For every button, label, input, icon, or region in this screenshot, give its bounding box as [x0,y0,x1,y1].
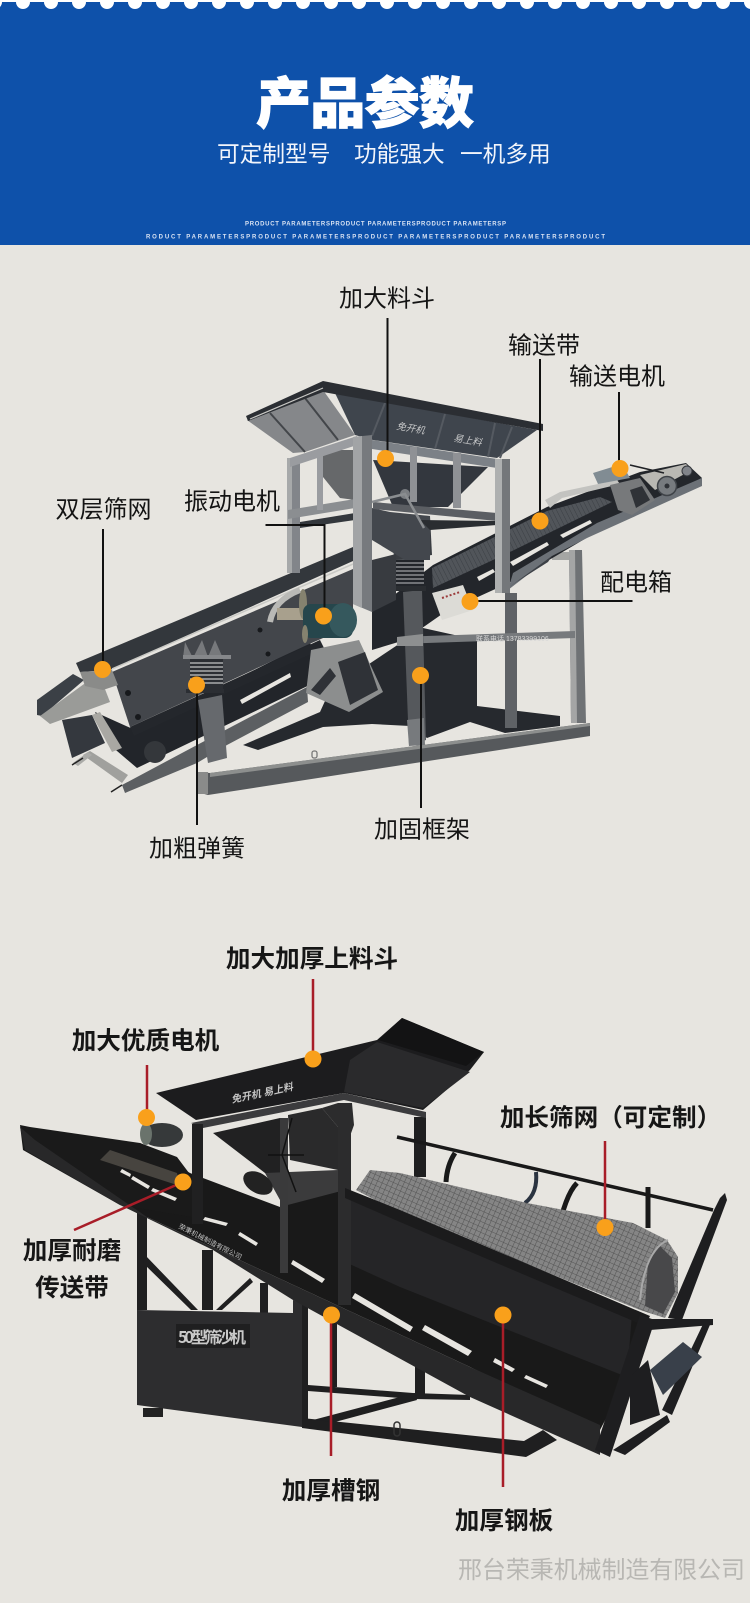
conveyor dark belt body [372,463,702,650]
english caption [146,222,605,240]
conveyor upper structure [20,1125,192,1217]
labels: upper machine [56,286,672,862]
body slits [240,673,291,704]
conveyor head frame [545,480,620,508]
conveyor textured belt surface [432,497,612,588]
label: conveyor motor: 输送电机 [569,364,665,390]
label: vibrating motor: 振动电机 [184,488,280,516]
icon: motor pulley [277,608,305,620]
company name footer: 邢台荣秉机械制造有限公司 [458,1557,745,1584]
label: wear-resistant belt: 传送带 [35,1274,109,1302]
callout dots: upper machine [94,450,628,694]
lower dark body [95,642,320,768]
right end frame [595,1193,727,1457]
label: quality motor: 加大优质电机 [72,1027,220,1055]
hopper lettering [395,420,483,449]
hopper lit inside [247,390,355,453]
title: 产品参数 [256,59,474,139]
label: conveyor belt: 输送带 [508,332,580,360]
icon: pivot disc and strut [372,489,424,528]
label: thick springs: 加粗弹簧 [149,836,245,862]
steel side panel [345,1195,632,1377]
hopper lettering: 易上料 [452,433,483,449]
motor mount box [306,640,383,712]
labels: lower machine [23,945,721,1535]
hopper front face [335,393,537,458]
diagonal chassis band [70,1143,650,1430]
leader lines: upper machine [103,318,632,825]
base frame [302,1418,557,1457]
left box under chute [62,715,105,758]
hopper rim [246,381,543,431]
hopper [156,1018,484,1120]
frame posts [330,1323,337,1387]
subtitle [217,141,551,167]
icon: lifting hook [312,751,317,758]
upper frame beams [290,436,357,467]
leader lines: lower machine [74,979,605,1487]
label: extended screen: 加长筛网（可定制） [500,1104,721,1132]
right front column [495,459,510,593]
front leg [198,695,227,763]
panel bolts [125,690,131,696]
right legs [505,593,517,728]
label: reinforced frame: 加固框架 [374,816,470,844]
panel: lower machine, drum screener [20,1018,727,1457]
screen side panel [112,569,353,727]
panel: upper machine, sand screener with hopper and conveyor [37,381,702,795]
icon: shield arc [270,590,300,622]
conveyor side rail [508,478,702,590]
lower front panel [137,1300,302,1427]
icon: conveyor pulley [658,466,692,496]
subtitle: 一机多用 [460,141,551,167]
main front column [353,435,372,612]
far cross bar with phone number [397,631,575,644]
label: hopper: 加大料斗 [339,286,435,312]
hopper lettering: 免开机 易上料 [230,1081,295,1106]
callout dots: lower machine [138,1050,614,1324]
mesh drum [356,1170,678,1318]
frame top beam [191,1093,426,1128]
conveyor slits [477,569,495,581]
funnel backs [213,1118,280,1173]
rear dark frame and tower [243,628,560,750]
english caption: RODUCT PARAMETERSPRODUCT PARAMETERSPRODUCT PARAMETERSPRODUCT PARAMETERSPRODUCT [146,234,605,240]
panel: blue header banner [0,0,750,245]
lower column block [372,554,396,612]
rear flap [650,1342,702,1395]
panel top lip [345,1188,650,1326]
screen top rail [76,547,353,672]
left discharge chute [37,670,118,724]
label: thick channel steel: 加厚槽钢 [282,1477,380,1505]
white control box [432,585,473,620]
icon: wheel valve [268,1118,304,1192]
hopper lettering: 免开机 [395,420,426,437]
rail plate text: 荣秉机械制造有限公司 [177,1222,244,1262]
subtitle: 可定制型号 [217,141,330,167]
icon: base hook [394,1422,400,1436]
slits [120,1169,548,1388]
panel: upper machine, sand screener with hopper and conveyor: 联系电话 13783399106 [476,634,549,643]
rear back post [414,1117,426,1177]
long chassis rail [20,1127,600,1455]
english caption: PRODUCT PARAMETERSPRODUCT PARAMETERSPRODUCT PARAMETERSP [245,222,506,228]
icon: vibrating motor [299,589,357,643]
subtitle: 功能强大 [354,141,445,167]
label: enlarged hopper: 加大加厚上料斗 [226,945,398,973]
front spring assembly [183,640,232,693]
small frame bars [83,751,128,783]
small motor behind [239,1166,277,1200]
middle column and leg [403,590,426,746]
label: thick steel plate: 加厚钢板 [455,1507,554,1535]
icon: upper motor [140,1123,183,1147]
label: distribution box: 配电箱 [600,570,672,596]
base beam [197,723,590,795]
top safety rail [397,1137,713,1236]
frame columns [192,1124,203,1224]
plate text: 50型筛沙机 [178,1324,246,1348]
icon: conveyor motor [593,464,664,484]
upper frame left leg [287,458,300,573]
lower grey rail [122,687,308,793]
hopper funnel [373,460,488,507]
second spring assembly [390,515,432,591]
label: wear-resistant belt: 加厚耐磨 [23,1238,121,1265]
label: double-layer screen: 双层筛网 [56,496,152,524]
